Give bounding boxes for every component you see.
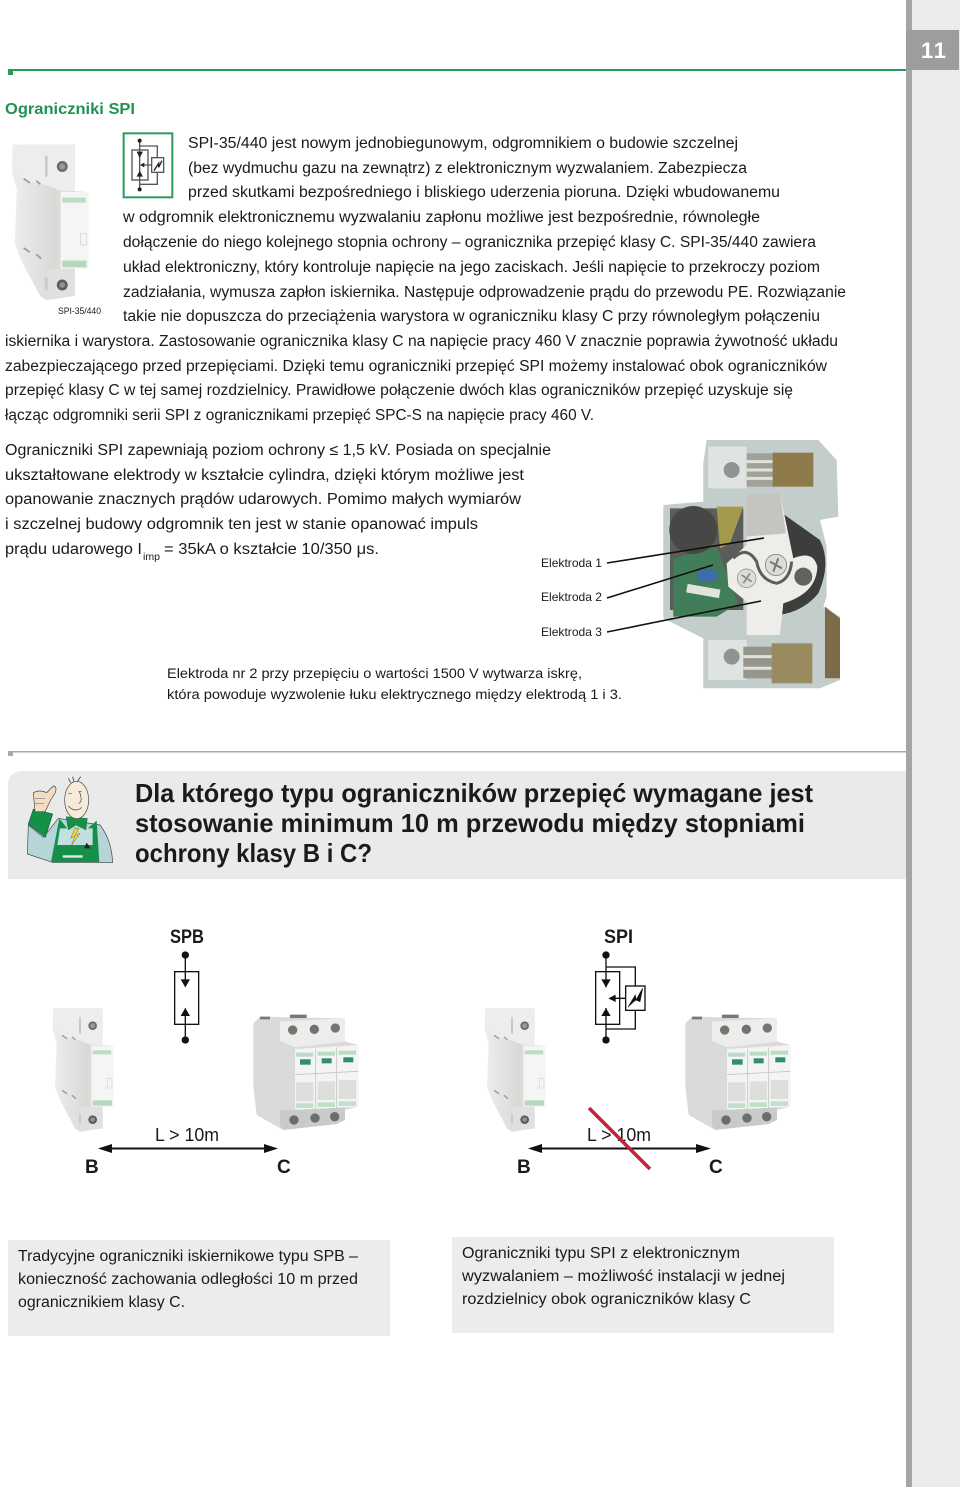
section rule bbox=[8, 751, 906, 756]
electrode labels bbox=[541, 556, 602, 639]
text block: intro paragraph: (bez wydmuchu gazu na zewnątrz) z elektronicznym wyzwalaniem. Zabezpiecza bbox=[188, 160, 747, 177]
B label: B bbox=[85, 1157, 99, 1178]
panel: SPI with electronic trigger: rozdzielnicy obok ograniczników klasy C bbox=[462, 1291, 751, 1308]
panel: SPI with electronic trigger bbox=[452, 1237, 834, 1333]
panel: traditional SPB bbox=[8, 1240, 390, 1336]
arrow: distance bbox=[98, 1144, 278, 1153]
electrode labels: Elektroda 2 bbox=[541, 590, 602, 604]
top rule bbox=[8, 69, 906, 75]
diagram: SPB bbox=[53, 927, 358, 1178]
text block: protection level: imp bbox=[143, 551, 160, 563]
device: type C arrester bbox=[253, 1015, 358, 1130]
text block: protection level bbox=[5, 442, 551, 563]
page number bbox=[906, 30, 959, 70]
product photo: SPI-35/440 bbox=[12, 145, 101, 317]
question heading: ochrony klasy B i C? bbox=[135, 838, 372, 868]
C label: C bbox=[709, 1157, 723, 1178]
device: type C arrester bbox=[685, 1015, 790, 1130]
page number: 11 bbox=[921, 38, 946, 63]
text block: protection level: i szczelnej budowy odgromnik ten jest w stanie opanować impuls bbox=[5, 516, 478, 533]
question heading: Dla którego typu ograniczników przepięć wymagane jest bbox=[135, 778, 813, 808]
text block: intro paragraph: iskiernika i warystora. Zastosowanie ogranicznika klasy C na napięcie pracy 460 V znacznie poprawia żywotność układu bbox=[5, 333, 838, 350]
heading: Ograniczniki SPI bbox=[5, 101, 135, 118]
caption: Elektroda nr 2 przy przepięciu o wartości 1500 V wytwarza iskrę, bbox=[167, 666, 582, 681]
text block: intro paragraph: takie nie dopuszcza do przeciążenia warystora w ograniczniku klasy C przy równoległym połączeniu bbox=[123, 308, 820, 325]
distance label: L > 10m bbox=[587, 1125, 651, 1145]
text block: intro paragraph: przed skutkami bezpośredniego i bliskiego uderzenia pioruna. Dzięki wbudowanemu bbox=[188, 184, 780, 201]
arrow: distance bbox=[528, 1144, 711, 1153]
text block: intro paragraph: zabezpieczającego przed przepięciami. Dzięki temu ograniczniki przepięć SPI możemy instalować obok ograniczników bbox=[5, 358, 828, 375]
strike-through bbox=[589, 1108, 650, 1169]
SPB symbol bbox=[175, 951, 199, 1044]
device: type B arrester bbox=[485, 1008, 545, 1132]
text block: intro paragraph: układ elektroniczny, który kontroluje napięcie na jego zaciskach. Jeśli napięcie to przekroczy poziom bbox=[123, 259, 820, 276]
distance label: L > 10m bbox=[155, 1125, 219, 1145]
question heading: stosowanie minimum 10 m przewodu między stopniami bbox=[135, 808, 805, 838]
text block: intro paragraph bbox=[5, 135, 846, 424]
caption bbox=[167, 666, 622, 702]
panel: SPI with electronic trigger: wyzwalaniem – możliwość instalacji w jednej bbox=[461, 1268, 785, 1285]
panel: traditional SPB: ogranicznikiem klasy C. bbox=[18, 1294, 185, 1311]
question panel bbox=[8, 771, 906, 879]
SPB label: SPB bbox=[170, 927, 204, 948]
text block: intro paragraph: w odgromnik elektronicznemu wyzwalaniu zapłonu możliwe jest bezpośrednie, równoległe bbox=[122, 209, 760, 226]
SPI label: SPI bbox=[604, 927, 633, 948]
panel: traditional SPB: konieczność zachowania odległości 10 m przed bbox=[18, 1271, 358, 1288]
text block: intro paragraph: przepięć klasy C w tej samej rozdzielnicy. Prawidłowe połączenie dwóch klas ograniczników przepięć uzyskuje się bbox=[5, 382, 793, 399]
text block: intro paragraph: SPI-35/440 jest nowym jednobiegunowym, odgromnikiem o budowie szczelnej bbox=[188, 135, 738, 152]
text block: protection level: ukształtowane elektrody w kształcie cylindra, dzięki którym możliwe jest bbox=[5, 467, 525, 484]
text block: protection level: prądu udarowego I bbox=[5, 541, 142, 558]
text block: intro paragraph: łącząc odgromniki serii SPI z ogranicznikami przepięć SPC-S na napięcie pracy 460 V. bbox=[5, 407, 594, 424]
text block: protection level: Ograniczniki SPI zapewniają poziom ochrony ≤ 1,5 kV. Posiada on specjalnie bbox=[5, 442, 551, 459]
caption: która powoduje wyzwolenie łuku elektrycznego między elektrodą 1 i 3. bbox=[167, 687, 622, 702]
icon: SPI circuit symbol bbox=[124, 133, 172, 197]
text block: protection level: opanowanie znacznych prądów udarowych. Pomimo małych wymiarów bbox=[5, 491, 522, 508]
question heading bbox=[135, 778, 813, 868]
SPI symbol bbox=[596, 951, 645, 1044]
callout lines: electrodes bbox=[607, 538, 764, 632]
product photo: SPI-35/440: SPI-35/440 bbox=[58, 306, 101, 317]
B label: B bbox=[517, 1157, 531, 1178]
panel: traditional SPB: Tradycyjne ograniczniki iskiernikowe typu SPB – bbox=[18, 1248, 358, 1265]
electrode labels: Elektroda 1 bbox=[541, 556, 602, 570]
C label: C bbox=[277, 1157, 291, 1178]
mascot bbox=[27, 777, 113, 863]
panel: SPI with electronic trigger: Ograniczniki typu SPI z elektronicznym bbox=[462, 1245, 740, 1262]
sidebar bbox=[906, 0, 960, 1487]
device: type B arrester bbox=[53, 1008, 113, 1132]
text block: intro paragraph: zadziałania, wymusza zapłon iskiernika. Następuje odprowadzenie prądu do przewodu PE. Rozwiązanie bbox=[123, 284, 846, 301]
diagram: SPI bbox=[485, 927, 790, 1178]
text block: protection level: = 35kA o kształcie 10/350 μs. bbox=[164, 541, 379, 558]
text block: intro paragraph: dołączenie do niego kolejnego stopnia ochrony – ogranicznika przepięć klasy C. SPI-35/440 zawiera bbox=[123, 234, 816, 251]
photo: opened arrester interior bbox=[663, 440, 840, 688]
electrode labels: Elektroda 3 bbox=[541, 625, 602, 639]
